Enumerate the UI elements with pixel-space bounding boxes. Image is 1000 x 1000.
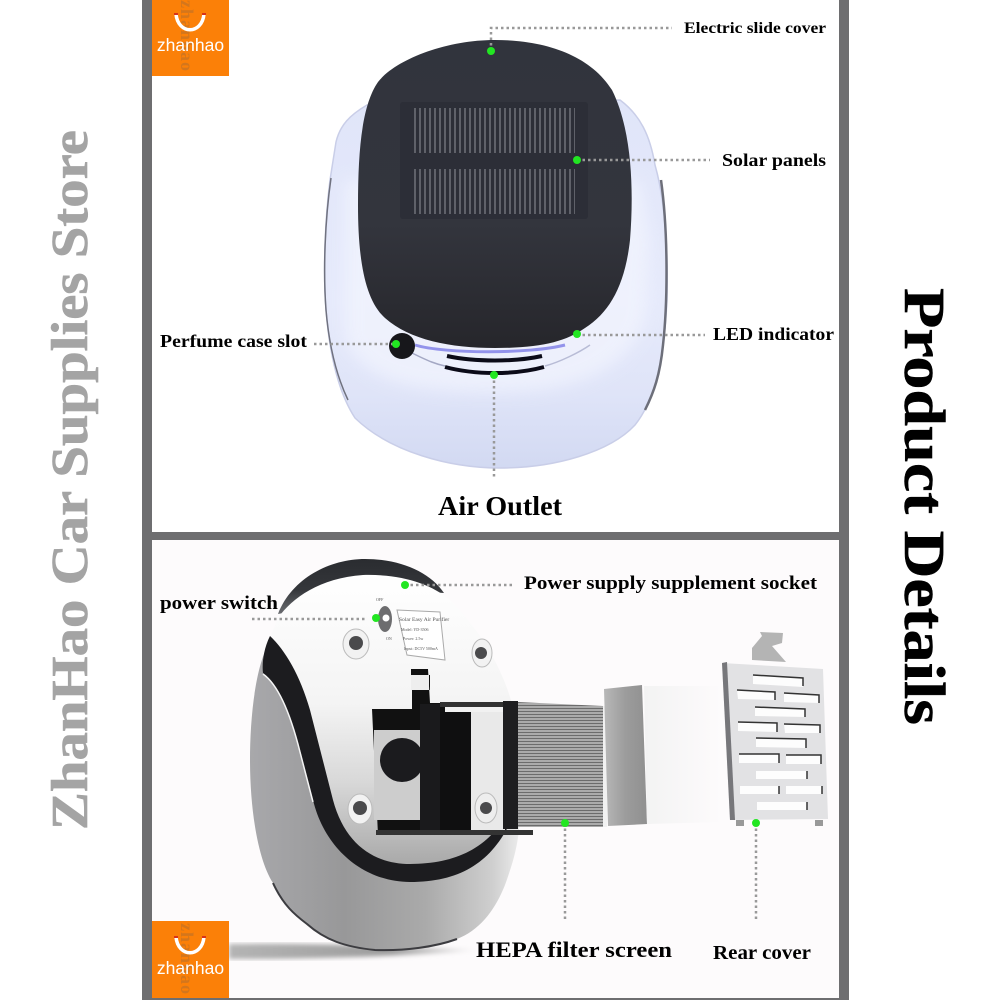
- callout: HEPA filter screen: HEPA filter screen: [476, 937, 672, 962]
- logo: bottom zhanhao: zhanhao: [177, 923, 197, 995]
- callout: air outlet: Air Outlet: [438, 491, 562, 521]
- callout: electric slide cover: [487, 20, 826, 55]
- side title: product details: Product Details: [892, 288, 957, 725]
- device: dark swoosh band: [263, 636, 516, 882]
- callout: solar panels: Solar panels: [722, 150, 826, 170]
- logo: bottom zhanhao: zhanhao: [157, 958, 224, 978]
- cover slots: [737, 675, 822, 810]
- callout: electric slide cover: Electric slide cover: [684, 20, 826, 37]
- callout: rear cover: Rear cover: [713, 943, 811, 964]
- floor shadow: [229, 944, 480, 959]
- callout: rear cover: [713, 819, 811, 964]
- device: power switch and rating label: [376, 597, 449, 660]
- device: power switch and rating label: Power: 2.5w: [403, 636, 423, 641]
- device: perfume case slot: [389, 333, 415, 359]
- callout: LED indicator: [573, 324, 834, 344]
- callout: perfume case slot: [160, 331, 400, 351]
- device: electric slide cover: [358, 40, 632, 348]
- device: fan compartment: [372, 669, 533, 835]
- device: LED glow: [410, 345, 590, 366]
- logo: top zhanhao: zhanhao: [157, 35, 224, 55]
- callout: LED indicator: LED indicator: [713, 324, 834, 344]
- callout: air outlet: [438, 371, 562, 521]
- callout: power supply supplement socket: Power supply supplement socket: [524, 573, 818, 594]
- logo: top zhanhao: [152, 0, 229, 76]
- device: screw mounts: [343, 629, 492, 824]
- device: power switch and rating label: Model: YD-3506: [401, 627, 429, 632]
- device: power switch and rating label: OFF: [376, 597, 384, 602]
- device: shell bottom edge: [273, 883, 457, 950]
- device: power switch and rating label: ON: [386, 636, 392, 641]
- callout: perfume case slot: Perfume case slot: [160, 331, 307, 351]
- side title: store name: ZhanHao Car Supplies Store: [42, 130, 99, 830]
- panel: exploded rear view: [152, 540, 839, 998]
- callout: solar panels: [573, 150, 826, 170]
- panel: frame bands: [142, 0, 849, 1000]
- device: top body: [325, 100, 667, 468]
- device: solar panel: [400, 102, 588, 219]
- logo: bottom zhanhao: [152, 921, 229, 998]
- callout: power supply supplement socket: [401, 573, 818, 594]
- panel: top product view: [152, 0, 839, 532]
- device: air outlet slots: [445, 356, 544, 373]
- rear cover part: [722, 632, 828, 826]
- device: power switch and rating label: Solar Easy Air Purifier: [399, 616, 449, 623]
- callout: power switch: [160, 593, 380, 622]
- device: top rim: [278, 559, 444, 614]
- device: power switch and rating label: Input: DC5V 500mA: [404, 646, 438, 651]
- callout: power switch: power switch: [160, 593, 278, 614]
- device: HEPA filter: [503, 685, 722, 829]
- callout: HEPA filter screen: [476, 819, 672, 962]
- logo: top zhanhao: zhanhao: [177, 0, 197, 72]
- device: white rear face: [270, 575, 519, 873]
- device: silver shell: [250, 637, 520, 950]
